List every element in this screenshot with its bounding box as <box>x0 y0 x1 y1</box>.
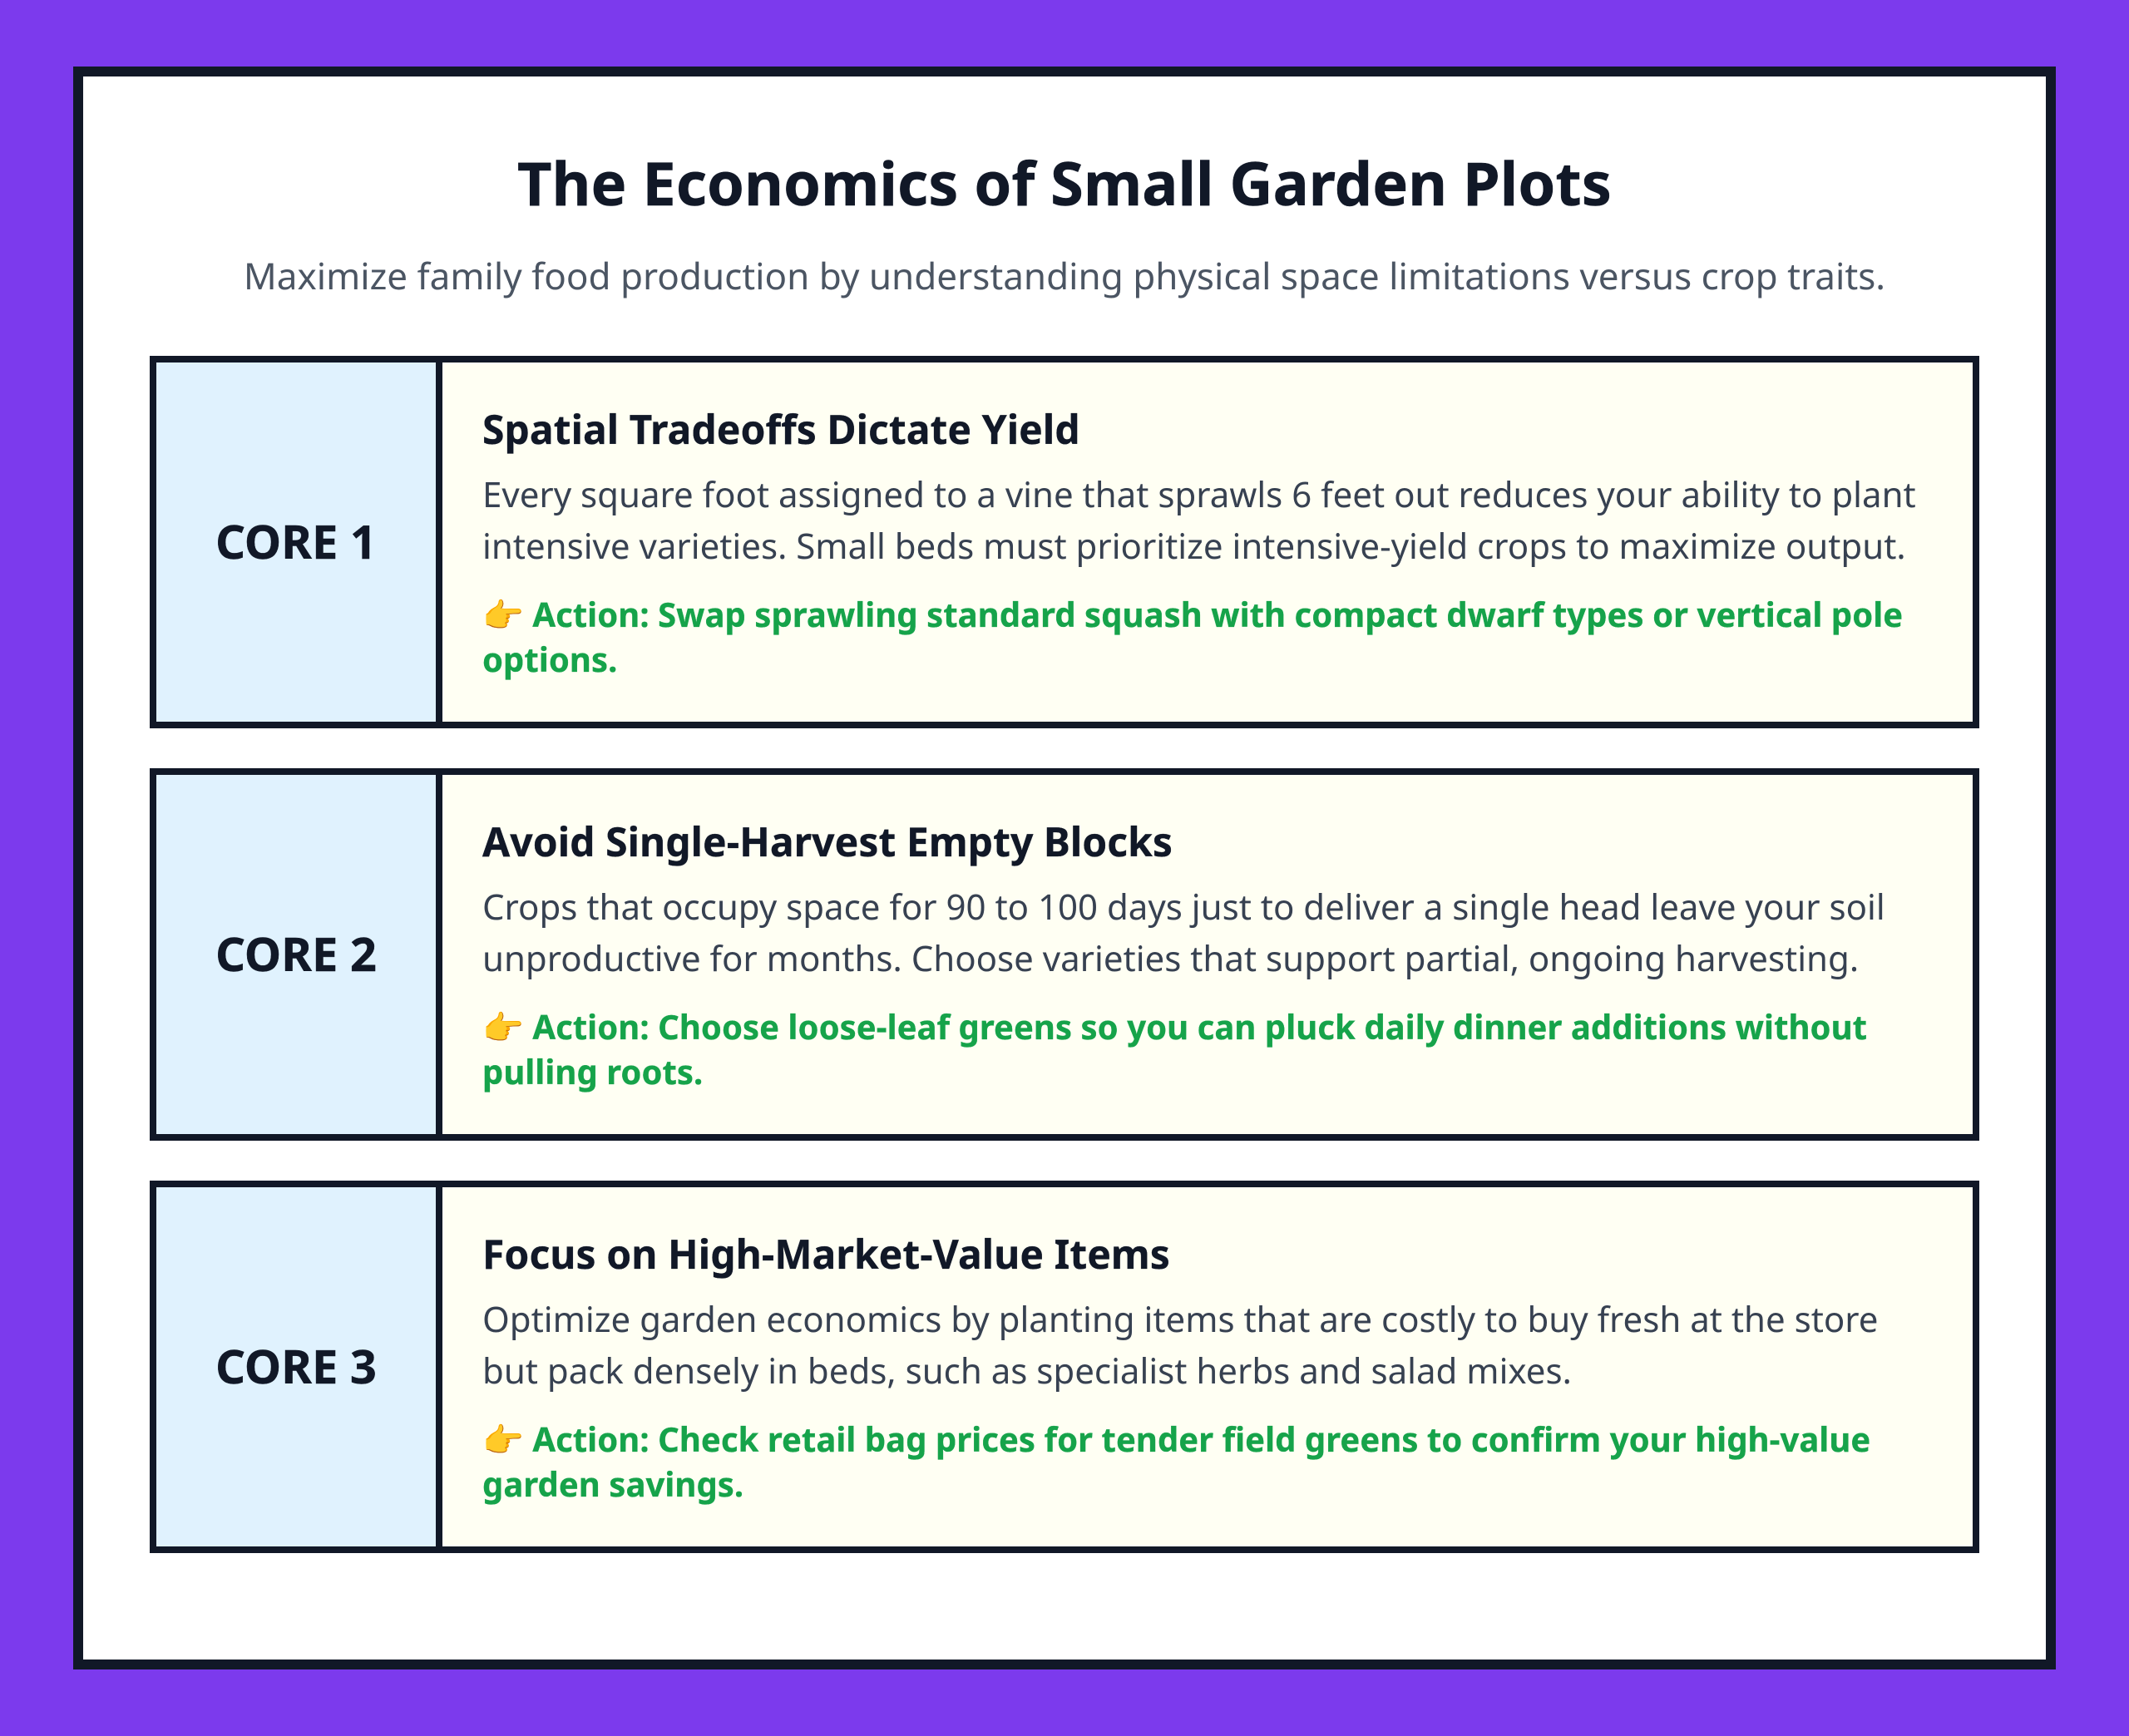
core 3 description: Optimize garden economics by planting items that are costly to buy fresh at the store <box>482 1295 1878 1343</box>
core 2 content <box>482 815 1885 1094</box>
core 3 action <box>482 1416 1870 1507</box>
core 3 description <box>482 1295 1878 1394</box>
core 2 heading: Avoid Single-Harvest Empty Blocks <box>482 815 1173 869</box>
core 1 description <box>482 471 1916 570</box>
core 1 label <box>156 362 442 722</box>
core 2 label <box>156 775 442 1134</box>
core 1 content <box>482 402 1916 682</box>
core 2 action <box>482 1004 1867 1094</box>
core 1 description: intensive varieties. Small beds must prioritize intensive-yield crops to maximize output. <box>482 522 1906 570</box>
panel: core 2 <box>150 768 1979 1141</box>
core 1 label: CORE 1 <box>215 510 377 573</box>
core 3 label: CORE 3 <box>215 1334 377 1398</box>
core 2 description: unproductive for months. Choose varieties that support partial, ongoing harvesting. <box>482 935 1859 982</box>
core 2 description: Crops that occupy space for 90 to 100 days just to deliver a single head leave your soil <box>482 883 1885 930</box>
core 1 description: Every square foot assigned to a vine that sprawls 6 feet out reduces your ability to plant <box>482 471 1916 518</box>
title: The Economics of Small Garden Plots <box>517 142 1612 224</box>
core 3 label <box>156 1187 442 1546</box>
core 2 action: 👉 Action: Choose loose-leaf greens so you can pluck daily dinner additions without <box>482 1004 1867 1049</box>
core 1 heading: Spatial Tradeoffs Dictate Yield <box>482 402 1080 456</box>
core 1 action <box>482 591 1903 682</box>
core 2 action: pulling roots. <box>482 1048 703 1094</box>
core 3 content <box>482 1227 1878 1507</box>
core 3 description: but pack densely in beds, such as specialist herbs and salad mixes. <box>482 1347 1572 1394</box>
core 2 description <box>482 883 1885 982</box>
core 3 action: 👉 Action: Check retail bag prices for tender field greens to confirm your high-value <box>482 1416 1870 1462</box>
core 1 action: 👉 Action: Swap sprawling standard squash with compact dwarf types or vertical pole <box>482 591 1903 637</box>
core 3 heading: Focus on High-Market-Value Items <box>482 1227 1170 1281</box>
core 1 action: options. <box>482 636 617 682</box>
panel: core 1 <box>150 356 1979 728</box>
core 3 action: garden savings. <box>482 1461 743 1507</box>
core 2 label: CORE 2 <box>215 922 377 985</box>
panel: core 3 <box>150 1181 1979 1553</box>
subtitle: Maximize family food production by understanding physical space limitations versus crop traits. <box>244 250 1885 300</box>
